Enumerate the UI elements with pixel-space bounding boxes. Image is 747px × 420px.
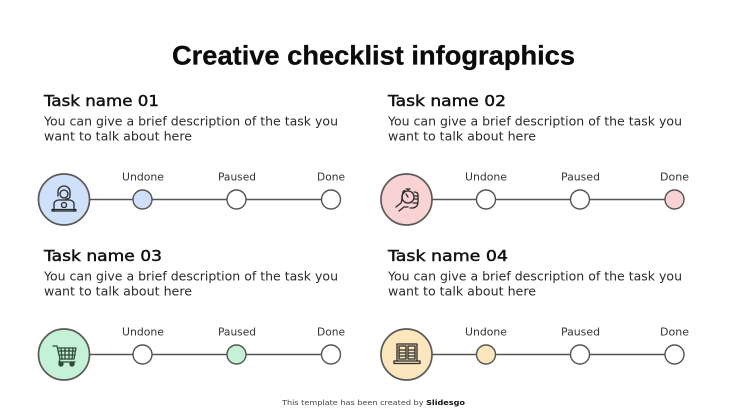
status track: task 03: Done <box>317 326 345 338</box>
status track: task 01: Done <box>317 172 345 184</box>
description: task 01: want to talk about here <box>44 130 192 144</box>
status track: task 01: Undone <box>122 172 164 184</box>
description: task 02: You can give a brief description of the task you <box>387 114 682 128</box>
description: task 03 <box>43 270 338 298</box>
description: task 04: You can give a brief description of the task you <box>387 270 682 284</box>
status track: task 02 <box>431 172 689 209</box>
description: task 03: You can give a brief description of the task you <box>43 270 338 284</box>
footer credit: This template has been created by Slidesgo <box>281 398 465 407</box>
panel: task 03 <box>38 247 345 380</box>
panel: task 02 <box>381 92 689 225</box>
description: task 01: You can give a brief description of the task you <box>43 114 338 128</box>
status track: task 03: Paused <box>218 326 256 338</box>
icon: shopping cart <box>38 329 90 380</box>
icon: laptop <box>381 329 432 380</box>
description: task 03: want to talk about here <box>44 284 192 298</box>
description: task 04 <box>387 270 682 298</box>
title: Creative checklist infographics <box>172 40 575 70</box>
panel: task 01 <box>38 92 345 225</box>
status track: task 02: Done <box>660 172 689 184</box>
status track: task 02: Paused <box>561 172 600 184</box>
description: task 04: want to talk about here <box>388 284 536 298</box>
status track: task 03 <box>89 326 345 364</box>
panel: task 04 <box>381 247 689 380</box>
status track: task 01 <box>89 172 345 209</box>
description: task 02: want to talk about here <box>388 130 536 144</box>
status track: task 01: Paused <box>218 172 256 184</box>
heading: task name 04: Task name 04 <box>387 247 508 265</box>
description: task 02 <box>387 114 682 144</box>
icon: support agent <box>38 174 90 225</box>
icon: hand holding stopwatch <box>381 174 432 225</box>
status track: task 04: Paused <box>561 326 600 338</box>
heading: task name 01: Task name 01 <box>43 92 159 110</box>
status track: task 03: Undone <box>122 326 164 338</box>
status track: task 04: Done <box>660 326 689 338</box>
description: task 01 <box>43 114 338 144</box>
heading: task name 02: Task name 02 <box>387 92 506 110</box>
status track: task 02: Undone <box>465 172 507 184</box>
status track: task 04: Undone <box>465 326 507 338</box>
heading: task name 03: Task name 03 <box>43 247 162 265</box>
status track: task 04 <box>431 326 689 364</box>
